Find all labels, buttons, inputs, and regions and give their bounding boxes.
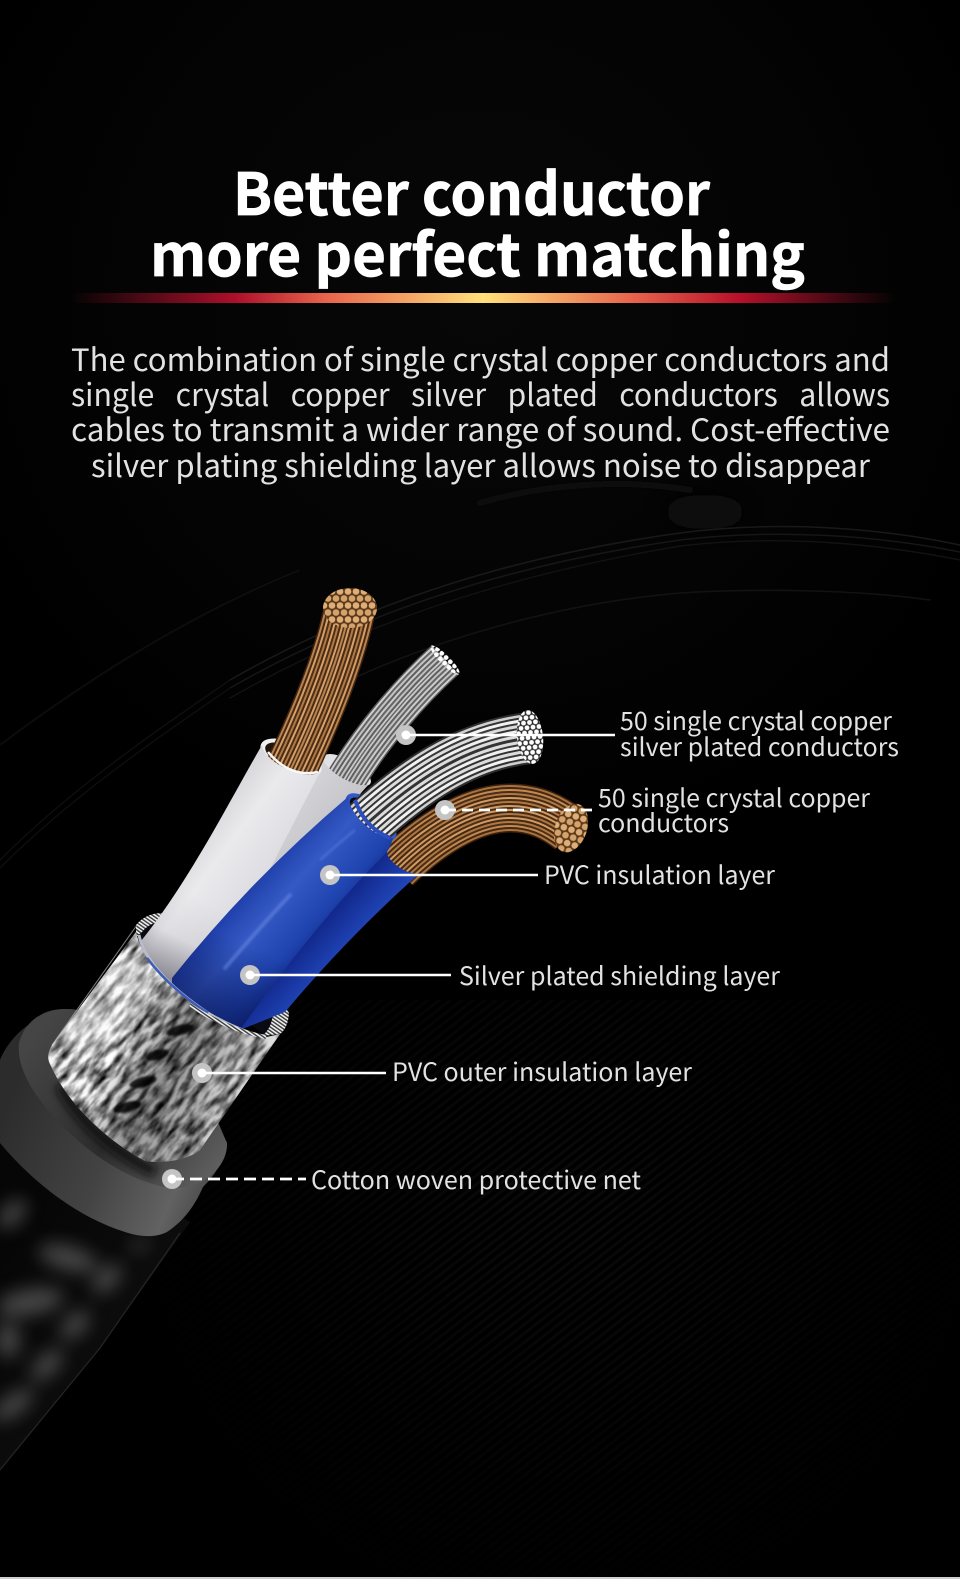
label: copper conductors xyxy=(598,779,870,840)
callout: shielding layer leader xyxy=(240,965,451,985)
silver wire, upper xyxy=(319,642,463,792)
blue insulated cable, front xyxy=(172,796,393,1030)
silver plated shielding braid xyxy=(48,924,280,1162)
callout: copper conductors leader xyxy=(435,800,595,820)
label: silver plated shielding layer: Silver plated shielding layer xyxy=(459,957,780,993)
intro paragraph: single crystal copper silver plated conductors allows xyxy=(71,370,890,415)
background with faint arcs xyxy=(0,481,960,1260)
copper conductor, upper xyxy=(287,588,377,777)
intro paragraph: The combination of single crystal copper conductors and xyxy=(71,335,890,380)
callout markers and leader lines xyxy=(162,725,615,1189)
callout: PVC insulation leader xyxy=(320,865,538,885)
title: more perfect matching xyxy=(150,209,805,293)
intro paragraph: cables to transmit a wider range of sound. Cost-effective xyxy=(71,405,890,450)
cable illustration xyxy=(0,588,615,1470)
white insulated cable, front xyxy=(141,745,320,995)
label: silver plated conductors: silver plated conductors xyxy=(620,728,899,764)
label: silver plated conductors: 50 single crystal copper xyxy=(620,702,892,738)
copper conductor, lower xyxy=(396,799,594,868)
callout: cotton net leader xyxy=(162,1169,306,1189)
blue cable inner opening, lower xyxy=(382,845,424,879)
intro paragraph: silver plating shielding layer allows noise to disappear xyxy=(91,441,871,486)
label: copper conductors: conductors xyxy=(598,804,729,840)
white cable inner opening xyxy=(255,730,327,786)
shield inner back rim xyxy=(135,913,290,1037)
label: cotton woven protective net: Cotton woven protective net xyxy=(311,1161,642,1197)
callout labels xyxy=(311,702,899,1197)
white insulated cable, rear xyxy=(230,757,370,905)
blue insulated cable, rear xyxy=(215,840,420,1030)
bottom edge strip xyxy=(0,1577,960,1579)
title xyxy=(150,148,805,293)
intro paragraph xyxy=(71,335,890,486)
blue cable inner opening, upper xyxy=(338,785,404,849)
braided cord jacket xyxy=(0,1188,190,1470)
silver conductor, lower xyxy=(360,709,546,830)
title: Better conductor xyxy=(233,148,711,232)
callout: silver plated conductors leader xyxy=(396,725,615,745)
label: silver plated conductors xyxy=(620,702,899,764)
label: PVC outer insulation layer: PVC outer insulation layer xyxy=(392,1053,692,1089)
label: PVC insulation layer: PVC insulation layer xyxy=(544,856,775,892)
label: copper conductors: 50 single crystal copper xyxy=(598,779,870,815)
title underline gradient rule xyxy=(70,293,896,303)
callout: outer insulation leader xyxy=(192,1063,386,1083)
black collar ring xyxy=(0,1009,227,1236)
